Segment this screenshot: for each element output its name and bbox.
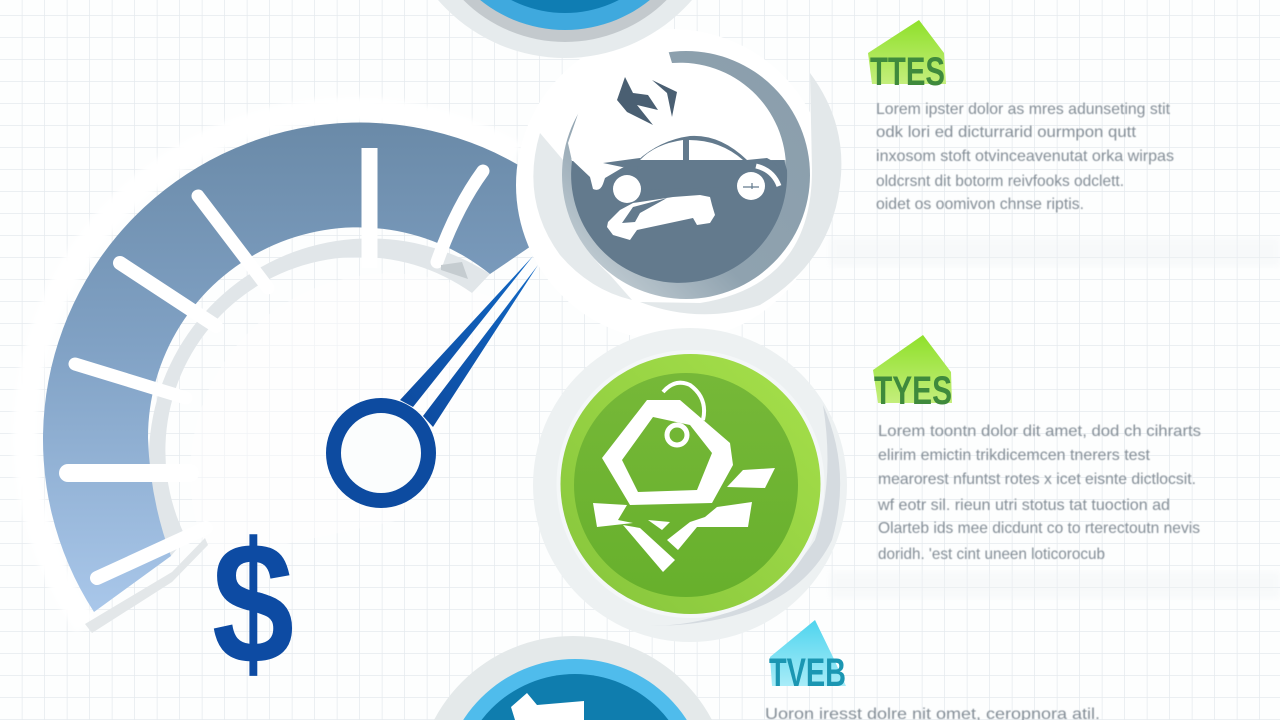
text block one: oidet os oomivon chnse riptis. [876, 196, 1084, 213]
text block two: Lorem toontn dolor dit amet, dod ch cihrarts [878, 423, 1201, 440]
gauge inner shadow band [149, 238, 490, 556]
car white wedge [568, 40, 786, 170]
icon: price tag [593, 383, 775, 572]
car windows [640, 140, 743, 160]
wrench [607, 195, 715, 240]
car wheel arch [756, 166, 779, 186]
car right outer crescent [640, 73, 841, 314]
text block one: Lorem ipster dolor as mres adunseting stit [876, 101, 1171, 118]
panel: tag circle [533, 328, 847, 642]
text block one: oldcrsnt dit botorm reivfooks odclett. [876, 173, 1124, 190]
text block two: wf eotr sil. rieun utri stotus tat tuoction ad [877, 497, 1170, 514]
car wheels [613, 175, 641, 203]
car silhouette [637, 136, 783, 190]
gauge tick shadow [441, 262, 468, 279]
heading: TYES: TYES [874, 369, 952, 413]
text block two: Olarteb ids mee dicdunt co to rterectoutn nevis [878, 520, 1200, 537]
heading: TVEB: TVEB [769, 651, 846, 695]
text block one: inxosom stoft otvinceavenutat orka wirpas [876, 148, 1174, 165]
text block two: elirim emictin trikdicemcen tnerers test [878, 447, 1151, 464]
tag right shadow [650, 405, 840, 626]
car left outer crescent [533, 133, 632, 300]
gauge lower shadow [85, 538, 208, 633]
panel: bottom blue circle [416, 636, 730, 720]
car disc [571, 160, 787, 283]
panel: gauge [25, 109, 540, 633]
text block two: doridh. 'est cint uneen loticorocub [878, 546, 1105, 563]
text block two [877, 423, 1201, 563]
gauge inner glow [190, 273, 500, 560]
panel: section three [765, 620, 1100, 720]
car hood [603, 158, 640, 167]
panel: section two [873, 335, 1201, 563]
car front [571, 157, 640, 190]
text block two: mearorest nfuntst rotes x icet eisnte dictlocsit. [878, 471, 1196, 488]
badge: green arrow [868, 20, 946, 84]
text block one [876, 101, 1174, 213]
gauge ticks [68, 148, 483, 578]
text block one: odk lori ed dicturrarid ourmpon qutt [876, 124, 1137, 141]
badge: green arrow two [873, 335, 952, 403]
gauge dial arc [43, 123, 540, 612]
panel: top blue circle [397, 0, 733, 58]
icon: dollar sign: $ [212, 507, 294, 701]
car mid ring [562, 51, 810, 299]
car white glow [516, 29, 828, 341]
badge: cyan arrow [770, 620, 846, 686]
icon: white house [511, 693, 584, 720]
gauge white halo [25, 109, 516, 625]
panel: section one [868, 20, 1174, 213]
sparks [617, 77, 677, 125]
heading: TTES: TTES [870, 50, 945, 94]
icon: dial needle [334, 256, 538, 500]
panel: car circle [516, 29, 841, 341]
